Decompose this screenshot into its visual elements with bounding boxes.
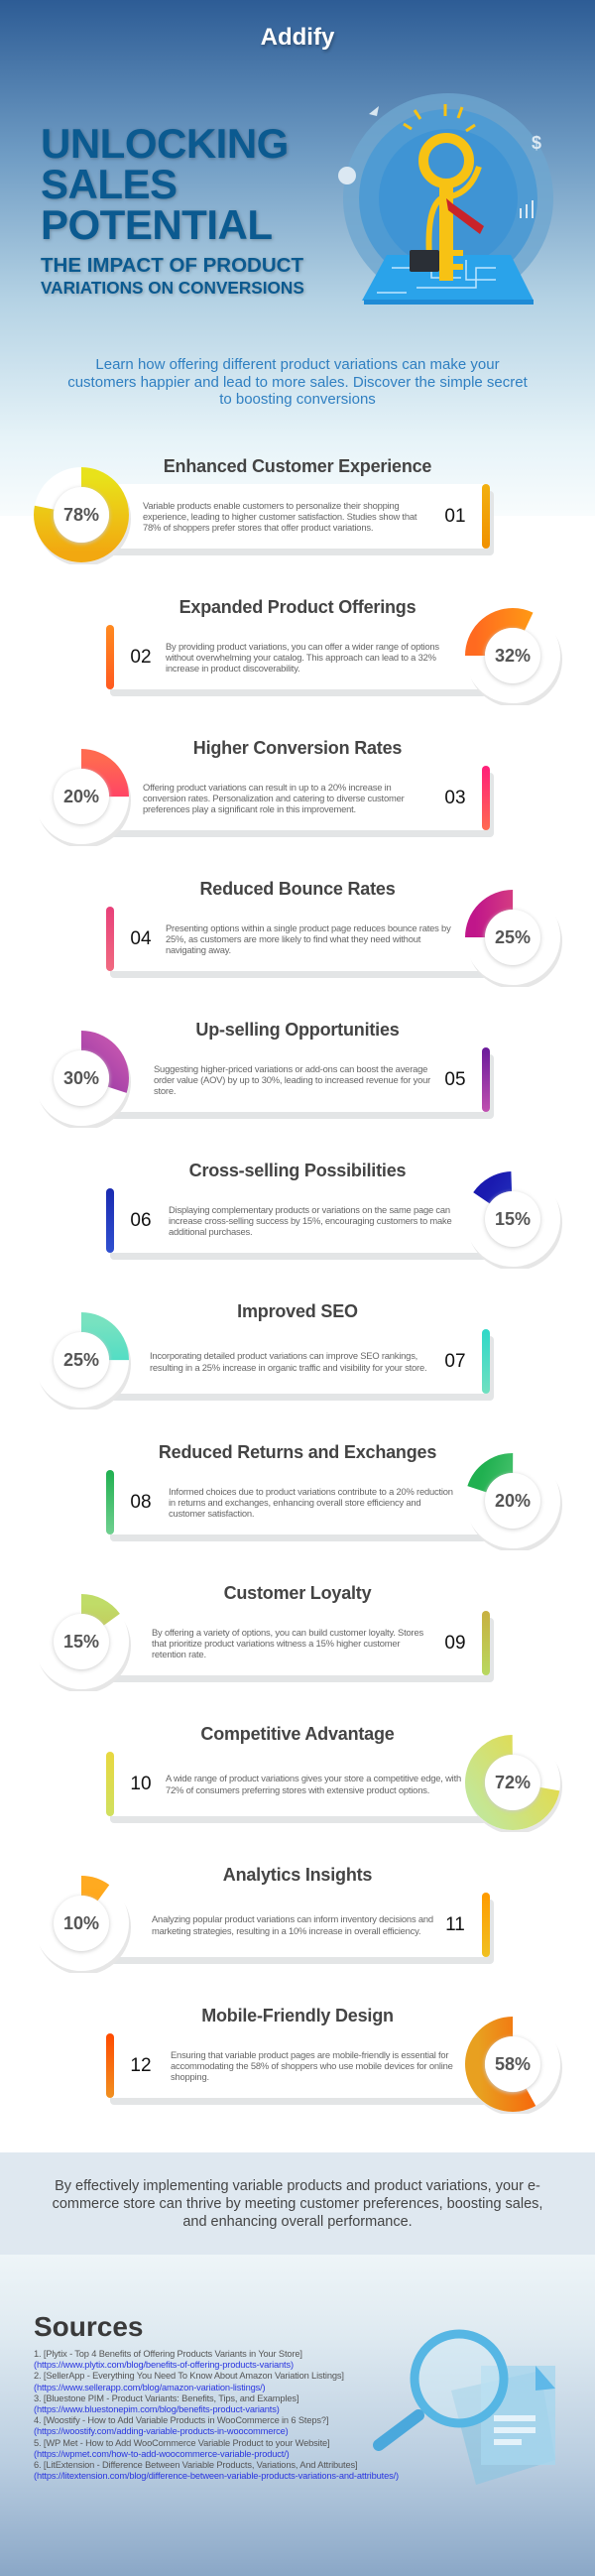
item 3: 20% xyxy=(63,787,99,806)
item 5: Up-selling Opportunities xyxy=(195,1020,400,1040)
sources list xyxy=(34,2349,399,2481)
icon: magnifier over document xyxy=(373,2329,555,2485)
item 7: 07 xyxy=(444,1351,466,1372)
item 5: 05 xyxy=(444,1069,466,1090)
item 1: Enhanced Customer Experience xyxy=(164,456,431,476)
item 8: Reduced Returns and Exchanges xyxy=(159,1442,436,1462)
conclusion band xyxy=(0,2152,595,2255)
item 12: Mobile-Friendly Design xyxy=(201,2006,394,2025)
intro text: Learn how offering different product variations can make your customers happier and lead to more sales. Discover the simple secret to boosting conversions xyxy=(67,356,528,408)
title: SALES xyxy=(41,161,178,207)
item 10: 10 xyxy=(130,1774,152,1794)
logo: Addify xyxy=(261,24,334,51)
item 6: 06 xyxy=(130,1210,152,1231)
sources heading: Sources xyxy=(34,2311,143,2342)
item 9: 09 xyxy=(444,1633,466,1654)
background header gradient xyxy=(0,0,595,516)
item 8: 20% xyxy=(495,1491,531,1511)
title: UNLOCKING xyxy=(41,120,289,167)
item 1: 78% xyxy=(63,505,99,525)
item 12 xyxy=(106,2006,562,2114)
item 1 xyxy=(34,456,494,564)
item 12: Ensuring that variable product pages are mobile-friendly is essential for accommodating the 58% of shoppers who use mobile devices for online shopping. xyxy=(171,2049,453,2082)
title xyxy=(41,120,305,298)
illustration: key character on maze: $ xyxy=(532,133,541,153)
item 6 xyxy=(106,1161,562,1269)
item 8: 08 xyxy=(130,1492,152,1513)
sources list: 5. [WP Met - How to Add WooCommerce Variable Product to your Website] xyxy=(34,2438,329,2448)
item 6: Displaying complementary products or variations on the same page can increase cross-selling success by 15%, encouraging customers to make additional purchases. xyxy=(169,1204,452,1237)
sources background xyxy=(0,2255,595,2576)
item 11: 10% xyxy=(63,1913,99,1933)
item 12: 12 xyxy=(130,2055,152,2076)
title: THE IMPACT OF PRODUCT xyxy=(41,254,303,277)
item 6: Cross-selling Possibilities xyxy=(189,1161,406,1180)
item 10: Competitive Advantage xyxy=(200,1724,395,1744)
item 2: By providing product variations, you can offer a wider range of options without overwhelming your catalog. This approach can lead to a 32% increase in product discoverability. xyxy=(166,641,439,674)
item 8 xyxy=(106,1442,562,1550)
conclusion band: By effectively implementing variable products and product variations, your e-commerce store can thrive by meeting customer preferences, boosting sales, and enhancing overall performance. xyxy=(53,2178,542,2230)
item 7: 25% xyxy=(63,1350,99,1370)
title: POTENTIAL xyxy=(41,201,272,248)
item 7: Incorporating detailed product variations can improve SEO rankings, resulting in a 25% increase in organic traffic and visibility for your store. xyxy=(150,1350,426,1373)
item 6: 15% xyxy=(495,1209,531,1229)
sources list: (https://wpmet.com/how-to-add-woocommerce-variable-product/) xyxy=(34,2449,290,2459)
item 4 xyxy=(106,879,562,987)
sources list: 2. [SellerApp - Everything You Need To Know About Amazon Variation Listings] xyxy=(34,2371,344,2381)
item 10: 72% xyxy=(495,1773,531,1792)
sources list: 4. [Woostify - How to Add Variable Products in WooCommerce in 6 Steps?] xyxy=(34,2415,328,2425)
item 2: 32% xyxy=(495,646,531,666)
item 4: 04 xyxy=(130,928,152,949)
item 9: 15% xyxy=(63,1632,99,1652)
item 10: A wide range of product variations gives your store a competitive edge, with 72% of consumers preferring stores with extensive product options. xyxy=(166,1773,461,1795)
sources list: (https://www.sellerapp.com/blog/amazon-variation-listings/) xyxy=(34,2383,265,2392)
sources list: (https://litextension.com/blog/difference-between-variable-products-variations-and-attributes/) xyxy=(34,2471,399,2481)
sources list: (https://www.plytix.com/blog/benefits-of-offering-products-variants) xyxy=(34,2360,294,2370)
item 1: Variable products enable customers to personalize their shopping experience, leading to higher customer satisfaction. Studies show that 78% of shoppers prefer stores that offer product variations. xyxy=(143,500,416,533)
item 3 xyxy=(40,738,494,846)
item 10 xyxy=(106,1724,562,1832)
item 1: 01 xyxy=(444,506,466,527)
item 7: Improved SEO xyxy=(237,1301,358,1321)
item 5: Suggesting higher-priced variations or add-ons can boost the average order value (AOV) by up to 30%, leading to increased revenue for your store. xyxy=(154,1063,430,1096)
item 4: Reduced Bounce Rates xyxy=(199,879,396,899)
sources list: (https://www.bluestonepim.com/blog/benefits-product-variants) xyxy=(34,2404,280,2414)
sources list: 3. [Bluestone PIM - Product Variants: Benefits, Tips, and Examples] xyxy=(34,2393,298,2403)
item 11: Analytics Insights xyxy=(223,1865,372,1885)
item 5 xyxy=(40,1020,494,1128)
item 9 xyxy=(40,1583,494,1691)
item 12: 58% xyxy=(495,2054,531,2074)
item 3: Offering product variations can result in up to a 20% increase in conversion rates. Personalization and catering to diverse customer preferences play a significant role in this improvement. xyxy=(143,782,405,814)
item 3: 03 xyxy=(444,788,466,808)
item 4: Presenting options within a single product page reduces bounce rates by 25%, as customers are more likely to find what they need without navigating away. xyxy=(166,922,451,955)
item 2 xyxy=(106,597,562,705)
item 7 xyxy=(40,1301,494,1410)
sources list: (https://woostify.com/adding-variable-products-in-woocommerce) xyxy=(34,2426,289,2436)
item 4: 25% xyxy=(495,927,531,947)
item 11: 11 xyxy=(445,1914,465,1935)
illustration: key character on maze xyxy=(338,93,553,305)
item 8: Informed choices due to product variations contribute to a 20% reduction in returns and exchanges, enhancing overall store efficiency and customer satisfaction. xyxy=(169,1486,453,1519)
item 2: 02 xyxy=(130,647,152,668)
item 9: Customer Loyalty xyxy=(224,1583,371,1603)
sources list: 6. [LitExtension - Difference Between Variable Products, Variations, And Attributes] xyxy=(34,2460,357,2470)
item 11: Analyzing popular product variations can inform inventory decisions and marketing strategies, resulting in a 10% increase in overall efficiency. xyxy=(152,1913,433,1936)
sources list: 1. [Plytix - Top 4 Benefits of Offering Products Variants in Your Store] xyxy=(34,2349,302,2359)
item 3: Higher Conversion Rates xyxy=(193,738,402,758)
item 5: 30% xyxy=(63,1068,99,1088)
item 11 xyxy=(40,1865,494,1973)
title: VARIATIONS ON CONVERSIONS xyxy=(41,278,304,298)
item 9: By offering a variety of options, you can build customer loyalty. Stores that prioritize product variations witness a 15% higher customer retention rate. xyxy=(152,1627,423,1659)
item 2: Expanded Product Offerings xyxy=(179,597,416,617)
